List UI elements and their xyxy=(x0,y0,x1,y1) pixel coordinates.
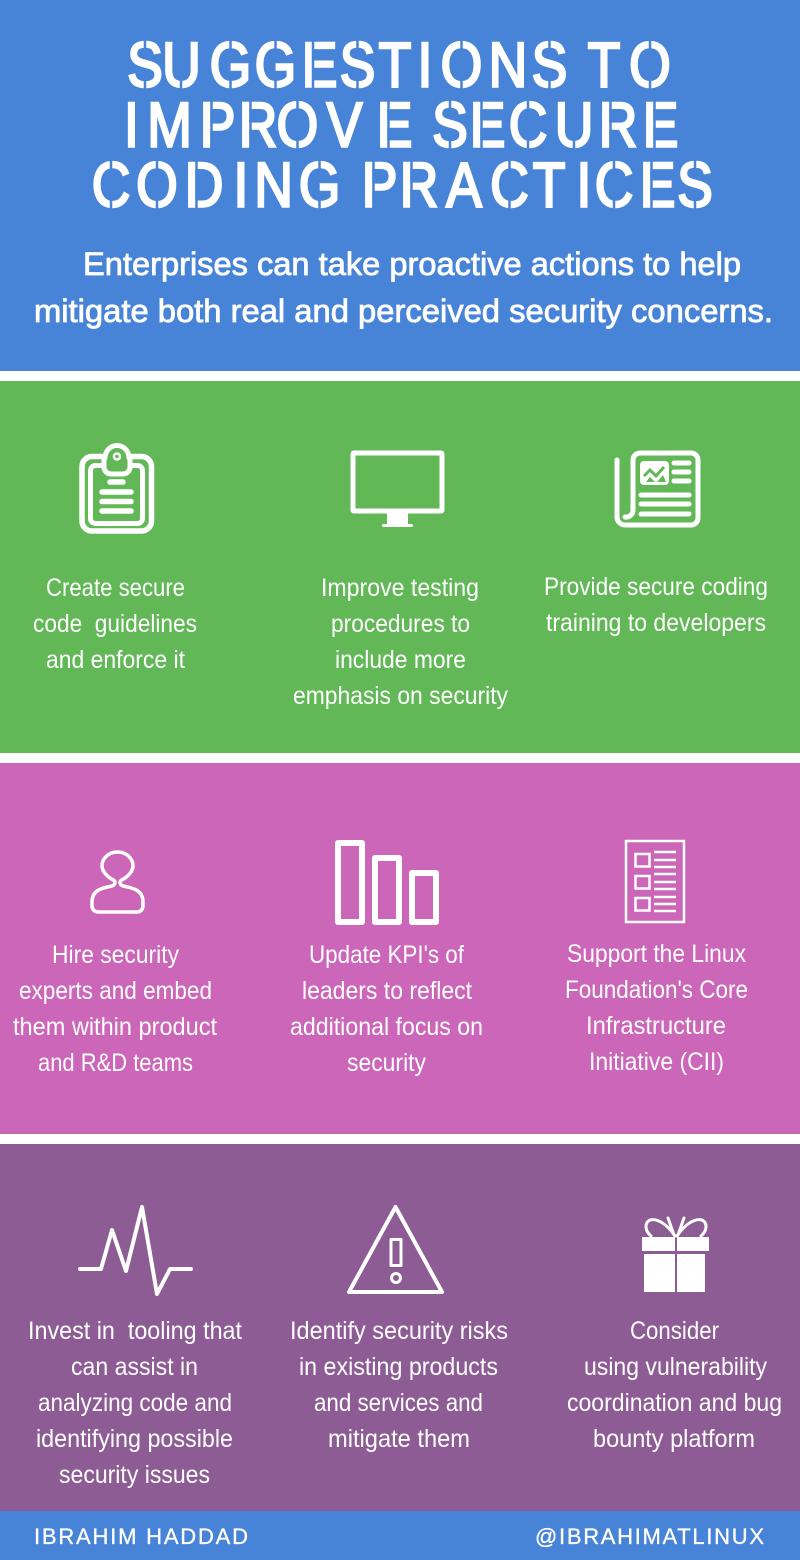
panel: purple suggestions xyxy=(0,1144,800,1511)
text: identify risks: in existing products xyxy=(299,1353,498,1381)
icon: warning triangle xyxy=(349,1207,442,1292)
title: CODING PRACTICES xyxy=(92,151,713,221)
text: improve testing: emphasis on security xyxy=(293,682,508,710)
text: training: Provide secure coding xyxy=(544,573,768,601)
text: improve testing: include more xyxy=(335,646,466,674)
text: update KPIs: security xyxy=(347,1049,426,1077)
text: identify risks: and services and xyxy=(314,1389,483,1417)
panel: header xyxy=(0,0,800,371)
icon: newspaper xyxy=(617,453,698,525)
text: training xyxy=(544,573,768,637)
icon: clipboard xyxy=(82,446,152,531)
text: update KPIs xyxy=(290,941,483,1077)
icon: person xyxy=(92,852,143,912)
panel: footer xyxy=(0,1511,800,1560)
panel: pink suggestions xyxy=(0,763,800,1134)
text: support CII xyxy=(565,940,748,1076)
text: create guidelines: and enforce it xyxy=(46,646,185,674)
text: consider bounty: Consider xyxy=(630,1317,719,1345)
text: update KPIs: additional focus on xyxy=(290,1013,483,1041)
text: consider bounty: coordination and bug xyxy=(567,1389,782,1417)
text: consider bounty xyxy=(567,1317,782,1453)
text: invest in tooling: analyzing code and xyxy=(38,1389,232,1417)
title: IMPROVE SECURE xyxy=(124,91,678,161)
text: support CII: Initiative (CII) xyxy=(589,1048,724,1076)
text: invest in tooling: Invest in tooling that xyxy=(28,1317,242,1345)
panel: green suggestions xyxy=(0,381,800,753)
text: invest in tooling: can assist in xyxy=(71,1353,198,1381)
author handle: @IBRAHIMATLINUX xyxy=(535,1524,764,1549)
title: SUGGESTIONS TO xyxy=(127,31,671,101)
subtitle: Enterprises can take proactive actions to help xyxy=(83,246,741,282)
text: identify risks xyxy=(290,1317,508,1453)
text: training: training to developers xyxy=(546,609,766,637)
author name: IBRAHIM HADDAD xyxy=(34,1524,248,1549)
text: identify risks: Identify security risks xyxy=(290,1317,508,1345)
text: support CII: Foundation's Core xyxy=(565,976,748,1004)
subtitle: mitigate both real and perceived security concerns. xyxy=(34,293,773,329)
text: create guidelines: code guidelines xyxy=(33,610,197,638)
text: create guidelines: Create secure xyxy=(46,574,185,602)
text: improve testing: procedures to xyxy=(331,610,470,638)
text: update KPIs: Update KPI's of xyxy=(309,941,464,969)
subtitle xyxy=(34,246,773,329)
text: improve testing xyxy=(293,574,508,710)
text: hire experts: Hire security xyxy=(52,941,179,969)
text: consider bounty: bounty platform xyxy=(593,1425,755,1453)
text: support CII: Support the Linux xyxy=(567,940,746,968)
icon: monitor xyxy=(353,453,442,527)
text: improve testing: Improve testing xyxy=(321,574,479,602)
icon: pulse line xyxy=(80,1207,191,1294)
text: invest in tooling: identifying possible xyxy=(36,1425,233,1453)
text: hire experts: them within product xyxy=(13,1013,217,1041)
text: support CII: Infrastructure xyxy=(586,1012,726,1040)
icon: bar chart xyxy=(338,843,436,922)
text: invest in tooling xyxy=(28,1317,242,1489)
text: hire experts xyxy=(13,941,217,1077)
text: consider bounty: using vulnerability xyxy=(584,1353,767,1381)
icon: checklist document xyxy=(626,841,684,922)
text: hire experts: experts and embed xyxy=(19,977,212,1005)
text: create guidelines xyxy=(33,574,197,674)
text: update KPIs: leaders to reflect xyxy=(302,977,472,1005)
icon: gift xyxy=(642,1218,709,1292)
text: invest in tooling: security issues xyxy=(59,1461,210,1489)
text: hire experts: and R&D teams xyxy=(38,1049,193,1077)
title xyxy=(92,31,713,221)
text: identify risks: mitigate them xyxy=(328,1425,470,1453)
